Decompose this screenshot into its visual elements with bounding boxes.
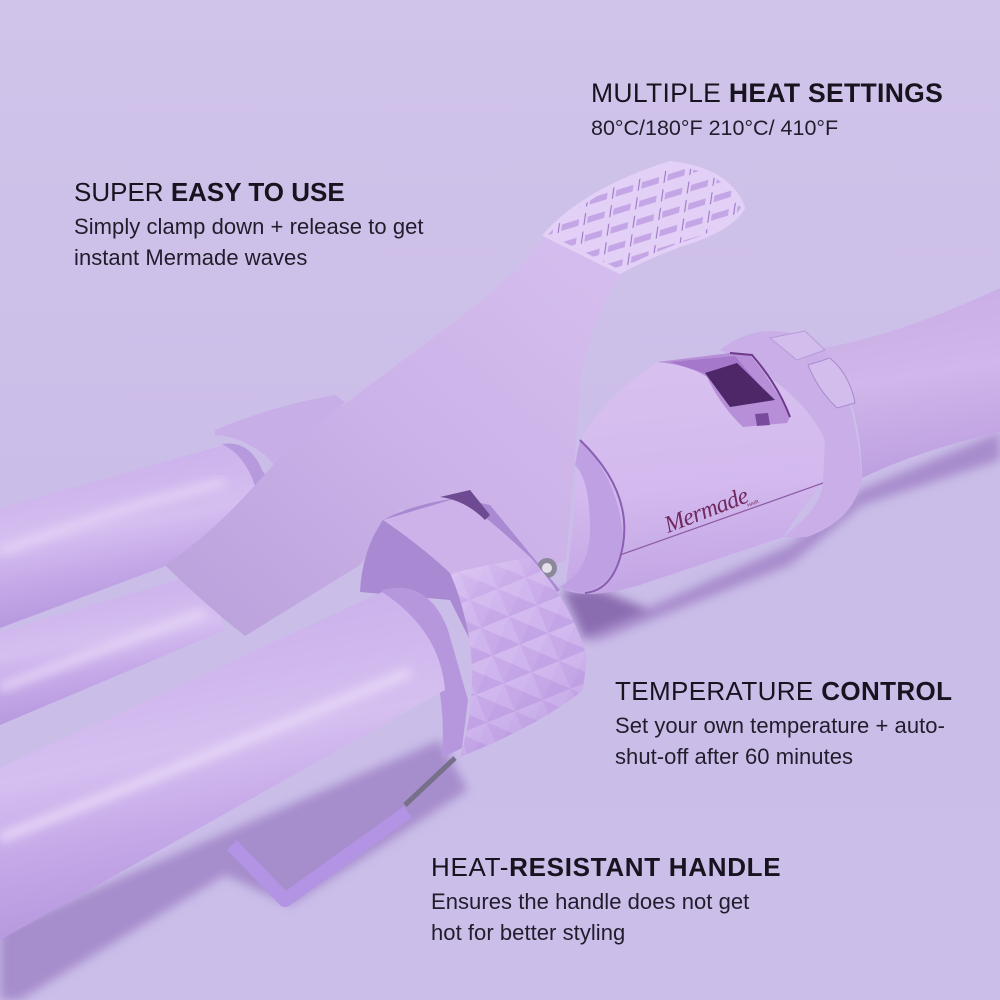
- collar and buttons: [720, 331, 862, 537]
- display window: [657, 353, 790, 427]
- callout: temperature control: [615, 676, 952, 769]
- clamp lever: [165, 163, 743, 636]
- callout: heat settings: 80°C/180°F 210°C/ 410°F: [591, 116, 838, 140]
- callout: temperature control: TEMPERATURE CONTROL: [615, 676, 952, 706]
- callout: heat settings: [591, 78, 943, 140]
- callout: easy to use: Simply clamp down + release to get: [74, 214, 424, 239]
- curling iron photo: HAIR: [747, 499, 760, 509]
- middle barrel: [0, 572, 225, 725]
- Mermade logo: Mermade: [660, 483, 753, 539]
- main handle body: [560, 353, 860, 594]
- callout: heat resistant handle: Ensures the handle does not get: [431, 889, 749, 914]
- thumb grip pattern: [545, 163, 743, 272]
- callout: temperature control: shut-off after 60 minutes: [615, 744, 853, 769]
- lower barrel collar: [382, 588, 468, 758]
- clamp base: [360, 490, 560, 640]
- shadows: [0, 432, 1000, 1000]
- callout: temperature control: Set your own temperature + auto-: [615, 713, 945, 738]
- screw: [537, 558, 557, 578]
- callout: easy to use: instant Mermade waves: [74, 245, 307, 270]
- upper barrel: [0, 444, 272, 628]
- diamond textured cap: [450, 557, 587, 757]
- callout: easy to use: SUPER EASY TO USE: [74, 177, 345, 207]
- callout: heat settings: MULTIPLE HEAT SETTINGS: [591, 78, 943, 108]
- callout: heat resistant handle: HEAT-RESISTANT HANDLE: [431, 852, 781, 882]
- callout: heat resistant handle: [431, 852, 781, 945]
- stand: [232, 758, 455, 900]
- lower barrel: [0, 592, 445, 940]
- wand handle: [823, 288, 1000, 478]
- callout: easy to use: [74, 177, 424, 270]
- upper barrel cap: [215, 395, 345, 470]
- callout: heat resistant handle: hot for better styling: [431, 920, 625, 945]
